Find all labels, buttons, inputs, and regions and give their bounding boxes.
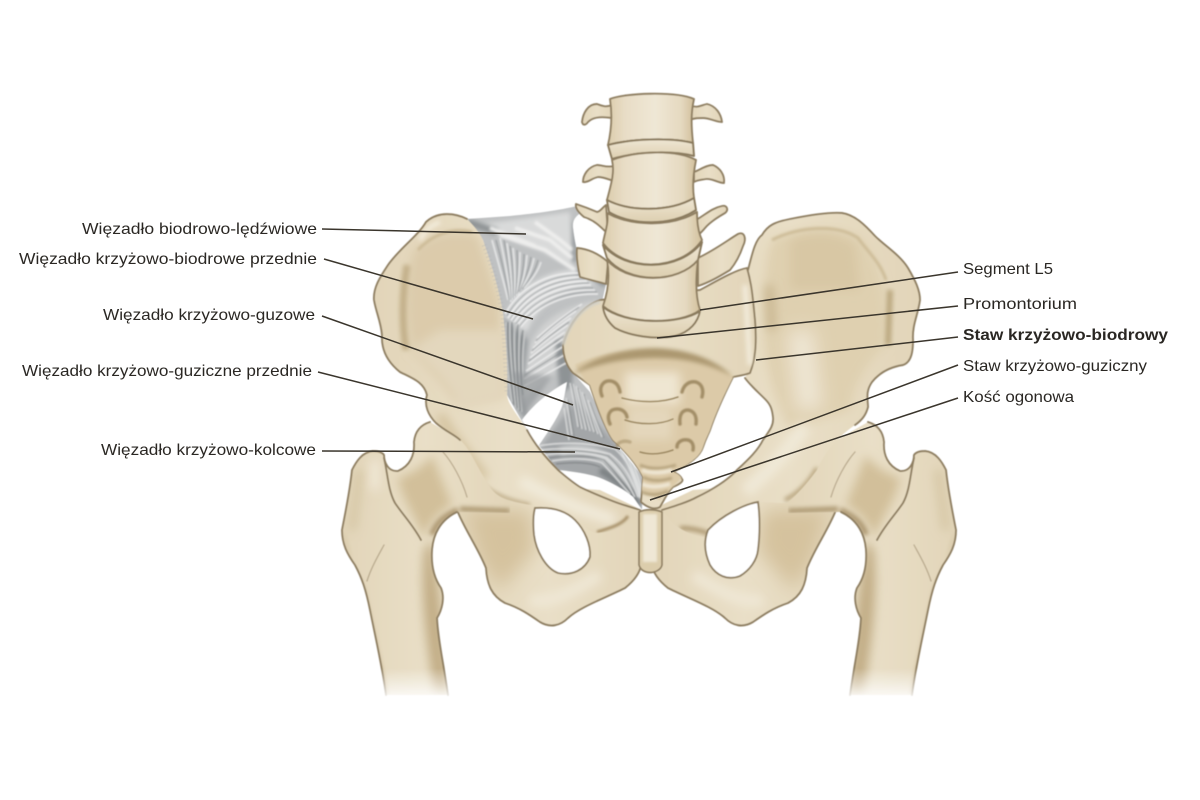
pubic symphysis bbox=[639, 510, 662, 573]
label: segment L5: Segment L5 bbox=[963, 261, 1053, 278]
left ilium with superior pubic ramus bbox=[374, 214, 640, 533]
dark arc under the promontory bbox=[573, 348, 733, 376]
lumbar vertebrae and discs bbox=[603, 94, 702, 338]
fringe where ligament meets the iliac fossa bbox=[484, 245, 507, 392]
body of sacrum below the arc bbox=[575, 350, 735, 500]
left femur bbox=[342, 422, 510, 695]
label: sacrotuberous ligament: Więzadło krzyżowo-guzowe bbox=[103, 307, 315, 324]
left labels bbox=[19, 221, 317, 459]
label: sacroiliac joint: Staw krzyżowo-biodrowy bbox=[963, 327, 1168, 344]
sacral transverse ridges bbox=[622, 397, 678, 454]
label: iliolumbar ligament: Więzadło biodrowo-lędźwiowe bbox=[82, 221, 317, 238]
pelvis illustration bbox=[342, 94, 956, 702]
right obturator foramen bbox=[705, 502, 760, 578]
soft grey edge on left sacral wing bbox=[563, 302, 600, 345]
coccyx bands bbox=[640, 465, 676, 495]
sacrum and coccyx bbox=[563, 268, 756, 508]
ligaments: grey fibre bands on the left of the sacrum bbox=[467, 206, 643, 510]
right labels bbox=[963, 261, 1168, 406]
sacral foramina bbox=[601, 381, 703, 450]
vertebra L5 upper bbox=[603, 212, 702, 264]
left pubis and ischium bbox=[455, 480, 642, 625]
left obturator foramen bbox=[533, 508, 590, 574]
label: anterior sacrococcygeal ligament: Więzadło krzyżowo-guziczne przednie bbox=[22, 363, 312, 380]
leader lines bbox=[318, 229, 958, 500]
right transverse processes bbox=[690, 104, 745, 286]
right pubis and ischium bbox=[651, 480, 838, 625]
left transverse processes bbox=[576, 104, 614, 284]
label: coccyx: Kość ogonowa bbox=[963, 389, 1074, 406]
right ilium with superior pubic ramus bbox=[662, 213, 920, 537]
vertebra L3 bbox=[608, 94, 694, 145]
disc L4-L5 bbox=[607, 198, 696, 222]
promontory rim bbox=[603, 307, 700, 338]
light centre of sacrum bbox=[625, 372, 680, 405]
disc L3-L4 bbox=[608, 139, 694, 159]
femur fade right bbox=[838, 668, 928, 702]
segment L5 bbox=[603, 260, 700, 321]
right femur bbox=[788, 422, 956, 695]
vertebra L4 bbox=[607, 152, 696, 209]
label: sacrococcygeal joint: Staw krzyżowo-guziczny bbox=[963, 358, 1147, 375]
label: sacrospinous ligament: Więzadło krzyżowo-kolcowe bbox=[101, 442, 316, 459]
label: anterior sacroiliac ligament: Więzadło krzyżowo-biodrowe przednie bbox=[19, 251, 317, 268]
lower white gap below sacrospinous ligament bbox=[558, 470, 642, 510]
label: promontory: Promontorium bbox=[963, 296, 1077, 313]
upper white gap behind ligaments bbox=[522, 382, 567, 448]
femur fade left bbox=[370, 668, 460, 702]
disc L5-S1 bbox=[603, 242, 702, 278]
